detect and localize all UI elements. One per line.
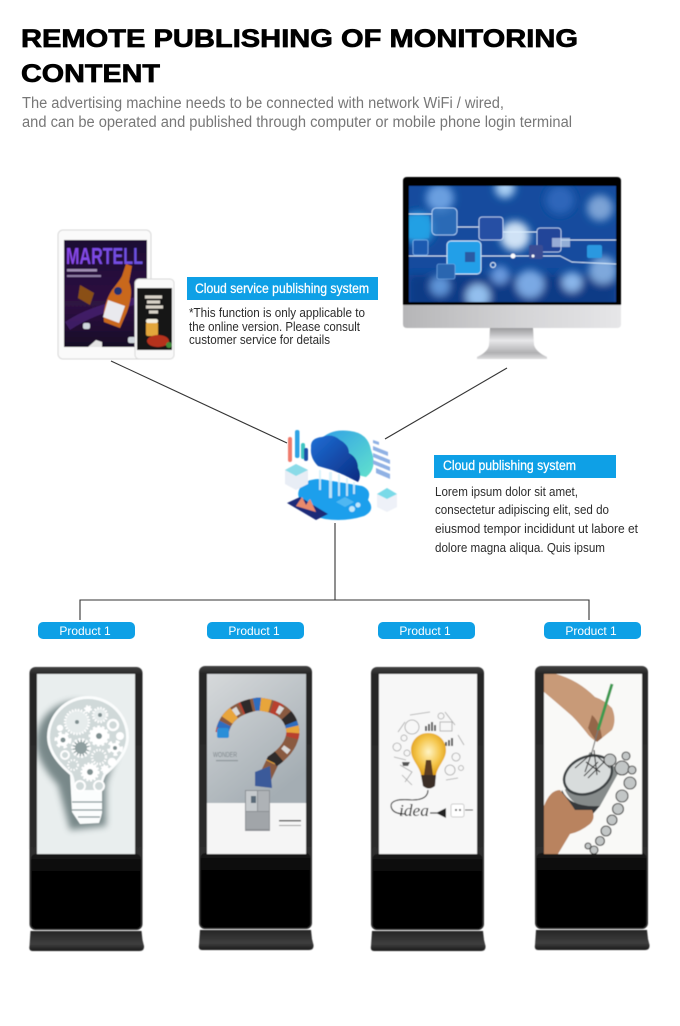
icon: cloud publishing hub (285, 430, 397, 520)
icon: tablet and phone: MARTELL (66, 243, 143, 269)
label: product 1, third: Product 1 (399, 624, 451, 638)
kiosk: hands sketching (535, 666, 650, 950)
label: product 1, third (378, 622, 475, 639)
text block: online version note (189, 305, 365, 347)
label: product 1, second (207, 622, 304, 639)
connector lines (80, 361, 589, 620)
icon: desktop monitor (402, 177, 621, 359)
label: product 1, second: Product 1 (228, 624, 280, 638)
heading: cloud service publishing system (187, 277, 378, 300)
text block: lorem ipsum: Lorem ipsum dolor sit amet, (435, 484, 578, 499)
title (21, 25, 578, 88)
text block: lorem ipsum: eiusmod tempor incididunt ut labore et (435, 521, 638, 536)
kiosk: idea light bulb (371, 667, 486, 951)
subtitle: and can be operated and published through computer or mobile phone login terminal (22, 114, 572, 131)
label: product 1, fourth (544, 622, 641, 639)
title: REMOTE PUBLISHING OF MONITORING (21, 25, 578, 53)
kiosk: wonder question mark (199, 666, 314, 950)
text block: online version note: customer service for details (189, 332, 330, 347)
label: product 1, fourth: Product 1 (565, 624, 617, 638)
heading: cloud publishing system (434, 455, 616, 478)
text block: online version note: the online version. Please consult (189, 319, 360, 334)
label: product 1, first: Product 1 (59, 624, 111, 638)
text block: lorem ipsum: consectetur adipiscing elit, sed do (435, 502, 609, 517)
subtitle (22, 95, 572, 131)
subtitle: The advertising machine needs to be connected with network WiFi / wired, (22, 95, 504, 112)
title: CONTENT (21, 60, 160, 88)
icon: tablet and phone (58, 230, 174, 359)
kiosk: gear light bulb (29, 667, 144, 951)
text block: online version note: *This function is only applicable to (189, 305, 365, 320)
heading: cloud service publishing system: Cloud service publishing system (195, 281, 369, 296)
heading: cloud publishing system: Cloud publishing system (443, 458, 576, 473)
label: product 1, first (38, 622, 135, 639)
text block: lorem ipsum (435, 484, 638, 555)
panel: cloud publishing system (434, 455, 638, 555)
icon: phone (135, 279, 174, 359)
kiosk: idea light bulb: idea (399, 801, 429, 820)
panel: cloud service publishing system (187, 277, 378, 347)
text block: lorem ipsum: dolore magna aliqua. Quis ipsum (435, 540, 605, 555)
kiosk: wonder question mark: WONDER (213, 750, 237, 759)
